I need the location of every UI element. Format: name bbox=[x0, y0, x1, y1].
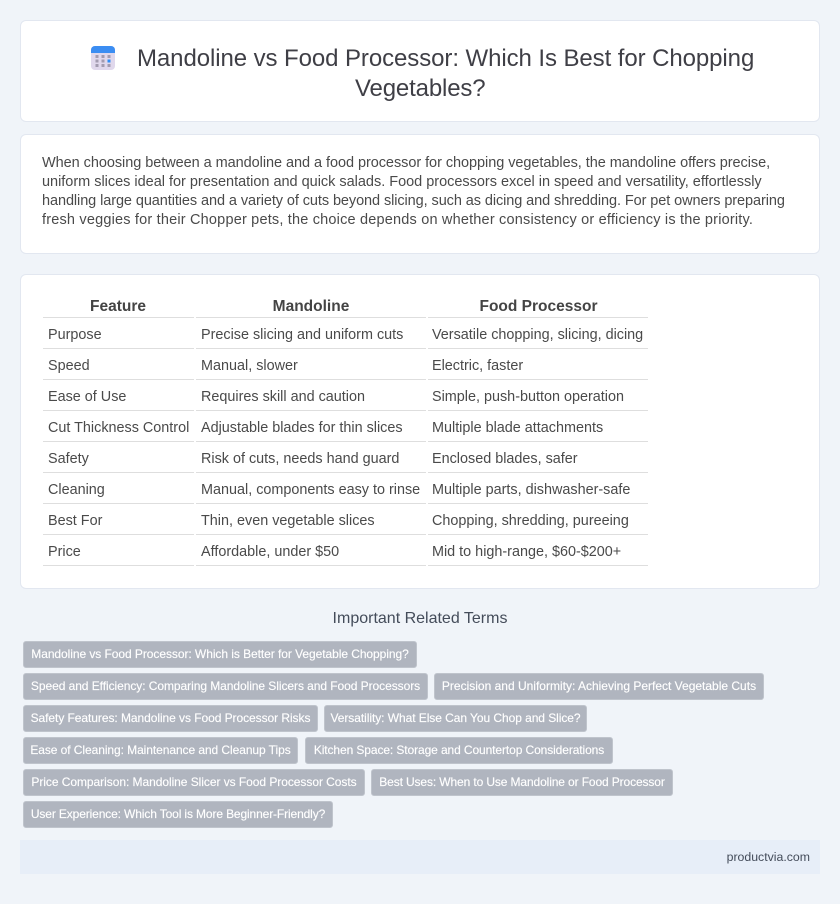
comparison table: Requires skill and caution bbox=[201, 389, 365, 405]
comparison table: Affordable, under $50 bbox=[201, 544, 339, 560]
comparison table: Adjustable blades for thin slices bbox=[201, 420, 403, 436]
table header: feature: Feature bbox=[90, 298, 146, 315]
intro text: When choosing between a mandoline and a food processor for chopping vegetables, the mandoline offers precise, bbox=[42, 155, 770, 171]
panel: comparison table bbox=[20, 274, 820, 589]
tag: Ease of Cleaning: Maintenance and Cleanup Tips bbox=[30, 743, 291, 757]
intro text: fresh veggies for their Chopper pets, the choice depends on whether consistency or efficiency is the priority. bbox=[42, 212, 753, 228]
title bbox=[137, 45, 754, 102]
comparison table: Cleaning bbox=[48, 482, 105, 498]
tag: Versatility: What Else Can You Chop and Slice? bbox=[330, 711, 581, 725]
comparison table: Versatile chopping, slicing, dicing bbox=[432, 327, 643, 343]
comparison table: Mandoline bbox=[273, 298, 349, 315]
title: Mandoline vs Food Processor: Which Is Best for Chopping bbox=[137, 45, 754, 72]
heading: important related terms: Important Related Terms bbox=[333, 610, 507, 627]
tag: Precision and Uniformity: Achieving Perfect Vegetable Cuts bbox=[442, 679, 756, 693]
tag bbox=[23, 705, 318, 732]
comparison table: Simple, push-button operation bbox=[432, 389, 624, 405]
tag bbox=[23, 641, 417, 668]
panel: introduction bbox=[20, 134, 820, 254]
intro text bbox=[42, 155, 785, 228]
tag: Speed and Efficiency: Comparing Mandoline Slicers and Food Processors bbox=[31, 679, 420, 693]
footer bar bbox=[20, 840, 820, 874]
comparison table: Ease of Use bbox=[48, 389, 126, 405]
header panel bbox=[20, 20, 820, 122]
comparison table: Safety bbox=[48, 451, 89, 467]
tag bbox=[23, 801, 333, 828]
comparison table: Food Processor bbox=[480, 298, 598, 315]
comparison table: Chopping, shredding, pureeing bbox=[432, 513, 629, 529]
comparison table: Best For bbox=[48, 513, 102, 529]
tag bbox=[23, 769, 365, 796]
comparison table: Risk of cuts, needs hand guard bbox=[201, 451, 399, 467]
comparison table: Multiple blade attachments bbox=[432, 420, 603, 436]
tag bbox=[434, 673, 764, 700]
tag bbox=[371, 769, 673, 796]
title: Vegetables? bbox=[355, 75, 485, 102]
comparison table: Enclosed blades, safer bbox=[432, 451, 578, 467]
comparison table: Price bbox=[48, 544, 81, 560]
intro text: uniform slices ideal for presentation and quick salads. Food processors excel in speed and versatility, effortlessly bbox=[42, 174, 762, 190]
tag: User Experience: Which Tool is More Beginner-Friendly? bbox=[31, 807, 325, 821]
icon: calendar grid bbox=[91, 46, 115, 70]
term tags bbox=[23, 641, 764, 828]
tag: Safety Features: Mandoline vs Food Processor Risks bbox=[31, 711, 310, 725]
tag bbox=[305, 737, 613, 764]
tag bbox=[23, 737, 298, 764]
intro text: handling large quantities and a variety of cuts beyond slicing, such as dicing and shredding. For pet owners preparing bbox=[42, 193, 785, 209]
tag: Best Uses: When to Use Mandoline or Food Processor bbox=[379, 775, 665, 789]
comparison table: Multiple parts, dishwasher-safe bbox=[432, 482, 630, 498]
tag: Price Comparison: Mandoline Slicer vs Food Processor Costs bbox=[31, 775, 357, 789]
comparison table: Mid to high-range, $60-$200+ bbox=[432, 544, 621, 560]
comparison table: Purpose bbox=[48, 327, 102, 343]
comparison table: Electric, faster bbox=[432, 358, 523, 374]
comparison table: Cut Thickness Control bbox=[48, 420, 189, 436]
comparison table: Thin, even vegetable slices bbox=[201, 513, 375, 529]
footer source: productvia.com bbox=[727, 850, 810, 864]
comparison table: Speed bbox=[48, 358, 90, 374]
tag bbox=[324, 705, 587, 732]
comparison table: Manual, components easy to rinse bbox=[201, 482, 420, 498]
tag bbox=[23, 673, 428, 700]
comparison table bbox=[43, 298, 648, 566]
comparison table: Precise slicing and uniform cuts bbox=[201, 327, 403, 343]
tag: Kitchen Space: Storage and Countertop Considerations bbox=[314, 743, 604, 757]
tag: Mandoline vs Food Processor: Which is Better for Vegetable Chopping? bbox=[31, 647, 409, 661]
comparison table: Manual, slower bbox=[201, 358, 298, 374]
